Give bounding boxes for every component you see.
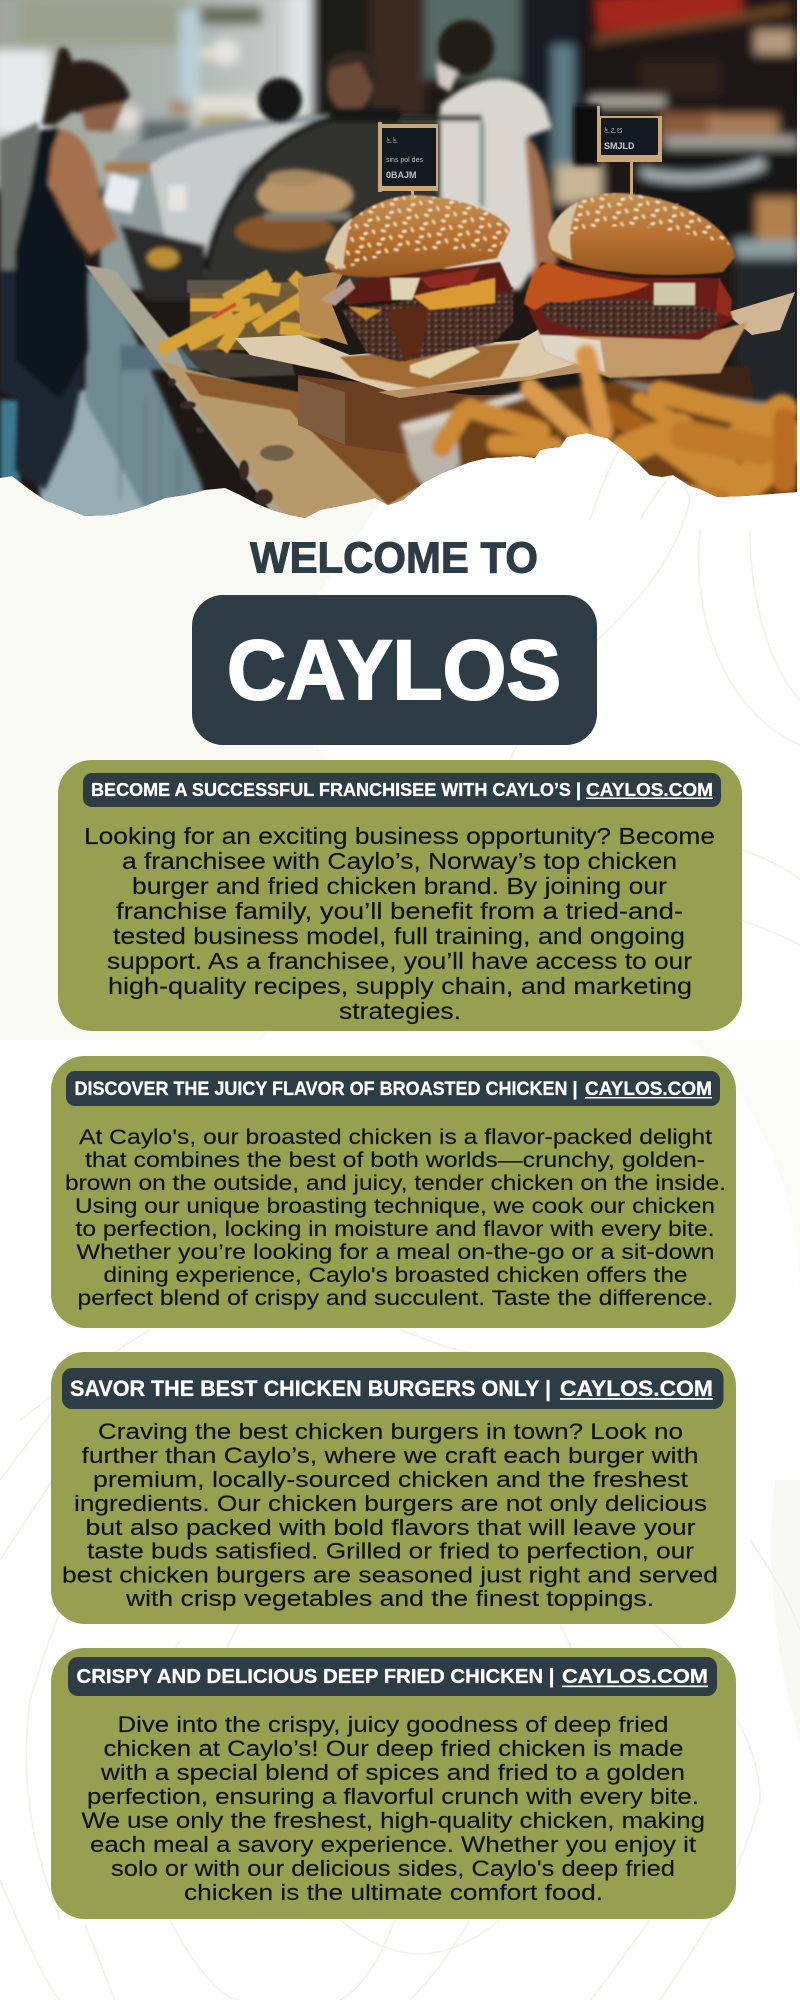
panel body text: solo or with our delicious sides, Caylo's deep fried xyxy=(111,1856,675,1881)
brand badge: caylos xyxy=(192,595,597,745)
panel body text xyxy=(65,1125,726,1310)
panel body text: Whether you’re looking for a meal on-the-go or a sit-down xyxy=(76,1240,714,1264)
panel heading: CAYLOS.COM xyxy=(585,1079,712,1100)
panel heading xyxy=(66,1071,720,1106)
panel body text: Dive into the crispy, juicy goodness of deep fried xyxy=(118,1712,668,1737)
panel body text: chicken at Caylo’s! Our deep fried chicken is made xyxy=(104,1736,684,1761)
panel body text: but also packed with bold flavors that will leave your xyxy=(86,1515,696,1540)
panel: chicken burgers xyxy=(51,1352,736,1624)
woman at the counter xyxy=(0,47,130,490)
wooden box under burger xyxy=(298,375,560,472)
panel body text: with a special blend of spices and fried to a golden xyxy=(100,1760,685,1785)
sign pick, left burger: ೬೬ xyxy=(386,134,398,146)
panel body text: taste buds satisfied. Grilled or fried to perfection, our xyxy=(87,1538,695,1564)
panel heading: DISCOVER THE JUICY FLAVOR OF BROASTED CHICKEN | xyxy=(74,1079,578,1100)
panel heading: BECOME A SUCCESSFUL FRANCHISEE WITH CAYLO’S | xyxy=(91,779,581,800)
panel body text: chicken is the ultimate comfort food. xyxy=(184,1880,603,1905)
panel body text: strategies. xyxy=(339,998,461,1024)
panel body text: At Caylo's, our broasted chicken is a flavor-packed delight xyxy=(79,1125,712,1149)
panel body text xyxy=(82,1712,705,1905)
panel heading: CAYLOS.COM xyxy=(586,779,713,800)
fries tray, right xyxy=(400,355,797,510)
panel body text: further than Caylo’s, where we craft each burger with xyxy=(82,1443,698,1468)
panel body text: Using our unique broasting technique, we cook our chicken xyxy=(75,1194,715,1218)
fries plate, left xyxy=(160,275,325,378)
panel body text: brown on the outside, and juicy, tender chicken on the inside. xyxy=(65,1171,726,1195)
panel body text: support. As a franchisee, you’ll have access to our xyxy=(107,948,692,974)
panel heading xyxy=(62,1368,724,1409)
panel body text: franchise family, you’ll benefit from a tried-and- xyxy=(116,898,683,924)
panel heading: CAYLOS.COM xyxy=(562,1665,708,1688)
panel heading: CRISPY AND DELICIOUS DEEP FRIED CHICKEN | xyxy=(76,1665,554,1688)
panel body text: dining experience, Caylo's broasted chicken offers the xyxy=(104,1263,688,1287)
panel: become a franchisee xyxy=(58,760,742,1031)
panel: deep fried chicken xyxy=(51,1648,736,1919)
sign pick, right burger: SMJLD xyxy=(604,141,635,151)
panel body text: perfect blend of crispy and succulent. Taste the difference. xyxy=(78,1286,714,1310)
sign pick, right burger xyxy=(597,106,662,197)
brand badge: caylos: CAYLOS xyxy=(227,623,561,717)
title: welcome to: WELCOME TO xyxy=(250,534,538,582)
left burger xyxy=(320,195,520,388)
panel heading: CAYLOS.COM xyxy=(560,1376,713,1401)
panel heading: SAVOR THE BEST CHICKEN BURGERS ONLY | xyxy=(70,1376,551,1401)
panel body text: burger and fried chicken brand. By joining our xyxy=(132,873,667,899)
panel body text: with crisp vegetables and the finest toppings. xyxy=(125,1586,654,1611)
panel body text: We use only the freshest, high-quality chicken, making xyxy=(82,1808,705,1833)
paper wrap xyxy=(235,270,795,398)
sign pick, left burger: 0BAJM xyxy=(386,170,417,180)
panel body text: each meal a savory experience. Whether you enjoy it xyxy=(90,1832,697,1857)
panel body text: to perfection, locking in moisture and flavor with every bite. xyxy=(76,1217,714,1241)
right burger xyxy=(524,193,755,400)
panel body text: a franchisee with Caylo’s, Norway’s top chicken xyxy=(122,848,677,874)
panel heading xyxy=(83,773,721,807)
panel body text xyxy=(84,823,715,1024)
panel body text: perfection, ensuring a flavorful crunch with every bite. xyxy=(87,1784,699,1809)
staff members xyxy=(258,20,600,290)
counter front and floor xyxy=(0,270,210,520)
panel body text: premium, locally-sourced chicken and the freshest xyxy=(93,1467,689,1492)
glass display case xyxy=(100,114,480,300)
panel body text: high-quality recipes, supply chain, and marketing xyxy=(108,973,692,999)
panel body text xyxy=(62,1419,718,1611)
panel body text: best chicken burgers are seasoned just right and served xyxy=(62,1562,718,1588)
panel body text: ingredients. Our chicken burgers are not only delicious xyxy=(74,1491,707,1516)
sign pick, left burger xyxy=(378,122,438,200)
panel body text: Craving the best chicken burgers in town? Look no xyxy=(98,1419,683,1444)
panel: broasted chicken xyxy=(51,1056,736,1328)
panel heading xyxy=(68,1657,717,1696)
sign pick, left burger: sins pol des xyxy=(386,157,423,164)
wooden counter top xyxy=(85,265,430,530)
sign pick, right burger: ೬೭೮ xyxy=(604,124,622,136)
hero photo: burgers and fries at a counter xyxy=(0,0,800,530)
blurred street window xyxy=(0,0,800,408)
panel body text: Looking for an exciting business opportunity? Become xyxy=(84,823,715,849)
panel body text: tested business model, full training, and ongoing xyxy=(113,923,685,949)
panel body text: that combines the best of both worlds—crunchy, golden- xyxy=(85,1148,705,1172)
